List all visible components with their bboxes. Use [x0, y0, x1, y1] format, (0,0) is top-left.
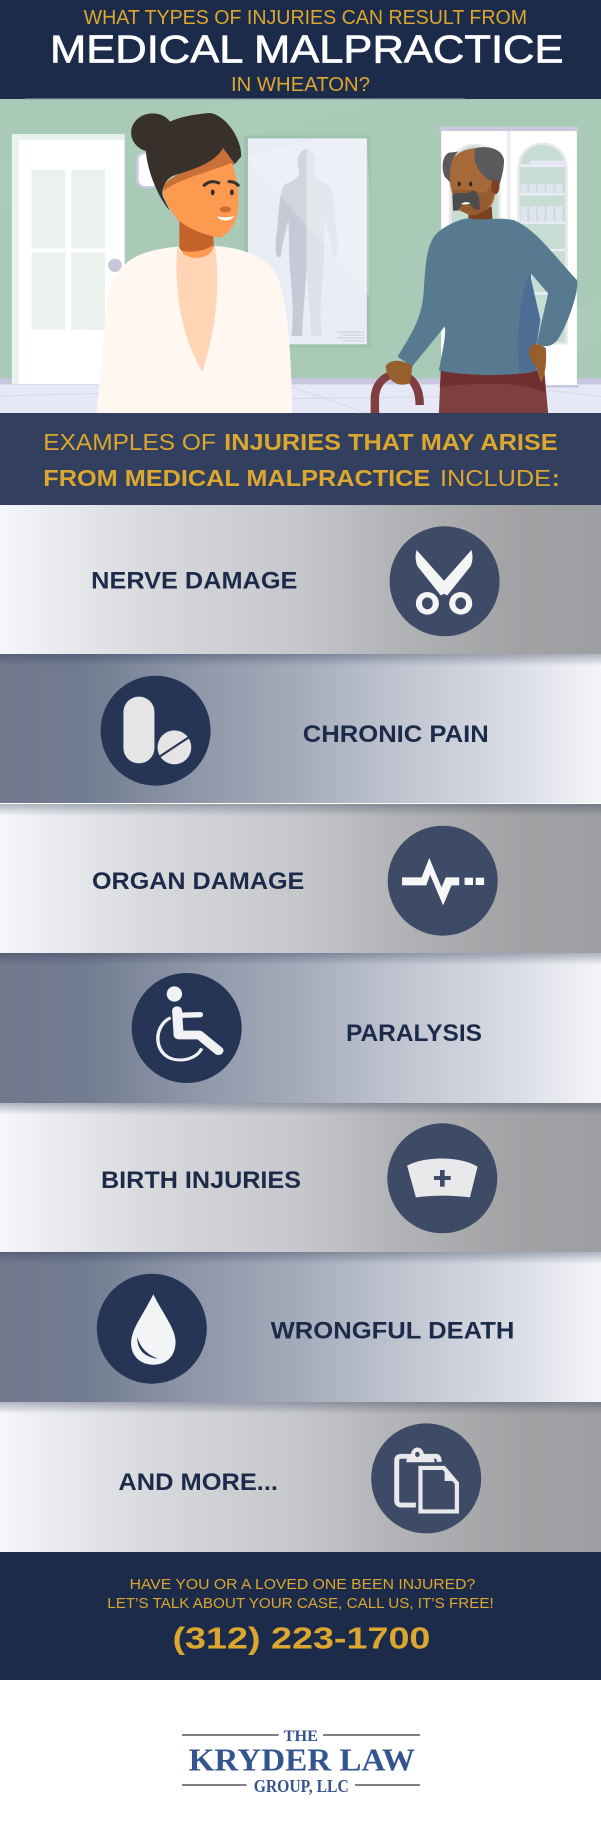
floor [0, 378, 601, 413]
cane [375, 374, 420, 413]
banner line 2 [43, 465, 560, 491]
title line 2: MEDICAL MALPRACTICE [50, 29, 564, 72]
icon: wheelchair [132, 973, 242, 1083]
label: WRONGFUL DEATH [271, 1318, 514, 1344]
label: CHRONIC PAIN [303, 721, 489, 748]
label: BIRTH INJURIES [101, 1167, 301, 1194]
logo: The Kryder Law Group, LLC [182, 1728, 420, 1796]
illustration: clinic scene [0, 99, 601, 413]
label: ORGAN DAMAGE [92, 868, 304, 895]
icon: clipboard [371, 1423, 481, 1533]
band: organ damage [0, 804, 601, 953]
cta line 2: LET’S TALK ABOUT YOUR CASE, CALL US, IT’S FREE! [107, 1595, 494, 1612]
band: wrongful death [0, 1252, 601, 1402]
title block [0, 0, 601, 100]
phone number: (312) 223-1700 [172, 1621, 430, 1656]
icon: heartbeat line [388, 826, 498, 936]
banner line 1 [43, 429, 558, 455]
banner line 2: INCLUDE [440, 465, 551, 491]
logo line 1: THE [284, 1728, 318, 1745]
band: birth injuries [0, 1103, 601, 1252]
label: AND MORE... [118, 1469, 278, 1496]
band: chronic pain [0, 654, 601, 803]
banner line 1: INJURIES THAT MAY ARISE [224, 429, 558, 455]
logo line 2: KRYDER LAW [189, 1742, 415, 1778]
title line 3: IN WHEATON? [231, 74, 370, 96]
call to action footer [0, 1552, 601, 1680]
band: nerve damage [0, 505, 601, 654]
banner line 2: FROM MEDICAL MALPRACTICE [43, 465, 430, 491]
anatomy poster [244, 135, 371, 347]
door [12, 134, 125, 384]
examples banner [0, 413, 601, 505]
band: and more [0, 1402, 601, 1552]
icon: pills [101, 676, 211, 786]
cta line 1: HAVE YOU OR A LOVED ONE BEEN INJURED? [130, 1576, 475, 1593]
banner line 1: EXAMPLES OF [43, 429, 216, 455]
icon: nurse cap [387, 1123, 497, 1233]
label: PARALYSIS [346, 1020, 482, 1047]
wall clock behind nurse [137, 153, 160, 187]
medicine cabinet [439, 127, 579, 388]
logo line 3: GROUP, LLC [254, 1776, 349, 1796]
banner line 2: : [552, 465, 560, 491]
icon: scissors [390, 526, 500, 636]
band: paralysis [0, 953, 601, 1103]
label: NERVE DAMAGE [91, 567, 297, 594]
icon: blood drop [97, 1274, 207, 1384]
nurse [97, 113, 292, 413]
elderly patient [386, 147, 577, 413]
title line 1: WHAT TYPES OF INJURIES CAN RESULT FROM [84, 7, 527, 29]
